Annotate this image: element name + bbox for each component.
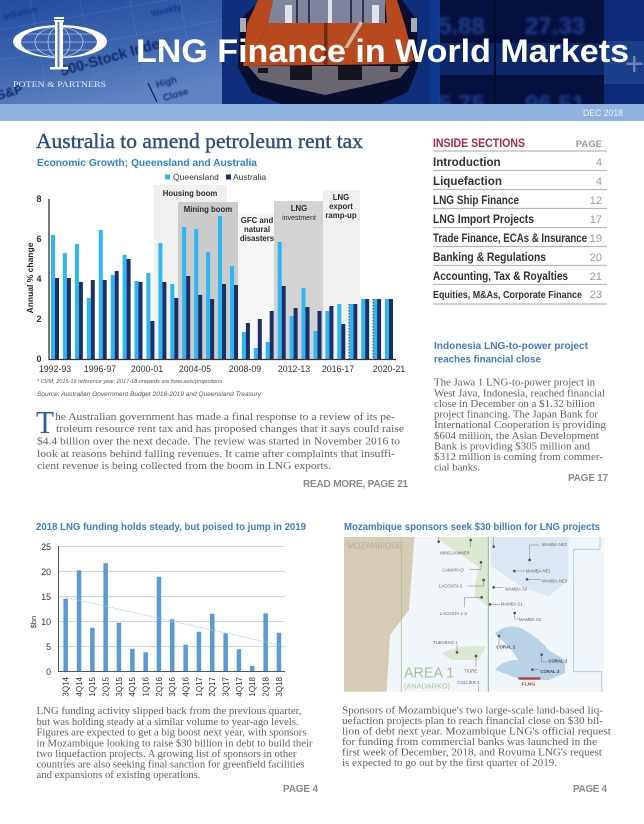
map: Area 1 offshore Mozambique: (ANADARKO) xyxy=(404,682,450,691)
funding article text: two liquefaction projects. A growing list of sponsors in other xyxy=(36,748,297,760)
x axis labels: 3Q14 xyxy=(62,676,70,697)
axes xyxy=(49,199,396,360)
y axis labels: 0 xyxy=(36,354,42,364)
well lines xyxy=(439,537,547,692)
panel: inside sections: Equities, M&As, Corporate Finance xyxy=(433,290,582,301)
period labels: Mining boom xyxy=(184,205,232,214)
panel: inside sections xyxy=(433,138,607,304)
panel: inside sections: Accounting, Tax & Royalties xyxy=(433,270,568,283)
y axis labels: 2 xyxy=(36,314,42,324)
well labels: MAMBA NE3 xyxy=(542,579,568,584)
x axis labels xyxy=(39,364,405,374)
country label: MOZAMBIQUE xyxy=(348,542,402,551)
Queensland bars xyxy=(51,216,389,359)
x axis labels: 2Q18 xyxy=(262,676,270,697)
funding bars xyxy=(63,563,281,671)
well labels: LACOSTA 2 xyxy=(439,583,463,588)
title: LNG Finance in World Markets xyxy=(136,33,629,69)
x axis labels: 4Q17 xyxy=(235,676,244,697)
side story text: Bank is providing $305 million and xyxy=(434,440,590,452)
panel: inside sections: 4 xyxy=(596,176,602,188)
side story text: West Java, Indonesia, reached financial xyxy=(434,388,605,400)
well labels: TUBARAO 1 xyxy=(433,640,458,645)
x axis labels: 4Q15 xyxy=(128,676,137,697)
map article text: is expected to go out by the first quarter of 2019. xyxy=(342,757,557,769)
funding article text: LNG funding activity slipped back from the previous quarter, xyxy=(36,705,302,717)
period labels: GFC and xyxy=(241,216,273,225)
period labels: natural xyxy=(244,225,270,234)
trend line xyxy=(66,597,279,645)
period labels: Housing boom xyxy=(163,189,217,198)
y axis unit: $bn xyxy=(29,616,38,628)
y axis labels: 5 xyxy=(46,642,51,652)
well labels: WINDJAMMER xyxy=(440,550,470,555)
well labels: CAMARAO xyxy=(442,568,465,573)
chart footnote: * CVM, 2015-16 reference year, 2017-18 onwards are forecasts/projections xyxy=(37,379,222,385)
x axis labels: 1Q15 xyxy=(88,676,97,697)
panel: inside sections: Introduction xyxy=(433,156,501,169)
funding article text: but was holding steady at a similar volume to year-ago levels. xyxy=(36,716,299,728)
side story heading: Indonesia LNG-to-power project xyxy=(434,340,588,352)
area label: AREA 1 xyxy=(404,666,454,682)
x axis labels: 3Q18 xyxy=(275,676,284,697)
side story text: cial banks. xyxy=(434,462,480,474)
x axis labels: 4Q16 xyxy=(182,676,190,697)
period labels: export xyxy=(329,202,353,211)
logo wordmark: POTEN & PARTNERS xyxy=(13,80,106,89)
lead article text: he Australian government has made a final response to a review of its pe- xyxy=(55,411,395,423)
well labels: CORAL 3 xyxy=(540,669,560,674)
y axis labels: 10 xyxy=(41,617,51,627)
y axis labels: 0 xyxy=(46,667,51,677)
panel: inside sections: Trade Finance, ECAs & Insurance xyxy=(433,232,587,245)
chart subtitle: Economic Growth; Queensland and Australia xyxy=(37,157,257,169)
x axis labels: 1992-93 xyxy=(39,364,71,374)
period labels xyxy=(163,189,357,243)
period shading xyxy=(154,185,360,359)
funding page reference: PAGE 4 xyxy=(283,784,318,795)
x axis labels: 2Q16 xyxy=(155,676,164,697)
y axis labels: 15 xyxy=(41,592,51,602)
funding article text: in Mozambique looking to raise $30 billion in debt to build their xyxy=(36,738,313,750)
header banner: Inflation xyxy=(2,4,38,22)
panel: inside sections: PAGE xyxy=(576,139,602,150)
side story text: close in December on a $1.32 billion xyxy=(434,398,595,410)
read more link: READ MORE, PAGE 21 xyxy=(303,479,408,490)
x axis labels: 3Q17 xyxy=(222,676,230,697)
side story heading: reaches financial close xyxy=(434,354,541,366)
header banner: Close xyxy=(162,86,190,104)
x axis labels: 3Q16 xyxy=(168,676,177,697)
well labels: MAMBA S1 xyxy=(501,601,523,606)
period labels: ramp-up xyxy=(325,211,357,220)
panel: inside sections: Liquefaction xyxy=(433,175,502,188)
chart: LNG funding xyxy=(29,542,285,697)
header banner: 5.88 xyxy=(438,13,485,40)
x axis labels: 2020-21 xyxy=(373,364,405,374)
panel: inside sections: 19 xyxy=(590,233,602,245)
axes xyxy=(58,546,285,672)
header banner: 27.33 xyxy=(525,13,585,40)
panel: inside sections: LNG Ship Finance xyxy=(433,194,519,207)
panel: inside sections: LNG Import Projects xyxy=(433,213,534,226)
x axis labels: 1Q18 xyxy=(248,676,257,697)
date band: DEC 2018 xyxy=(583,108,623,119)
map article text: uefaction projects plan to reach financial close on $30 bil- xyxy=(342,715,603,727)
map article text: first week of December, 2018, and Rovuma LNG's request xyxy=(342,746,602,758)
x axis labels: 1Q17 xyxy=(195,676,204,697)
lead article text xyxy=(36,404,404,472)
header banner: 500-Stock Index xyxy=(59,34,169,80)
y axis labels: 20 xyxy=(41,567,51,577)
legend xyxy=(165,172,266,182)
panel: inside sections: 17 xyxy=(590,214,602,226)
side story heading xyxy=(434,340,588,366)
map article text xyxy=(342,704,611,769)
well labels: CORAL 1 xyxy=(548,658,568,663)
side story page reference: PAGE 17 xyxy=(568,473,608,484)
toc heading: INSIDE SECTIONS xyxy=(433,138,525,150)
x axis labels: 2Q17 xyxy=(208,676,217,697)
well labels xyxy=(433,542,568,685)
x axis labels: 2004-05 xyxy=(179,364,211,374)
FLNG vessel: FLNG xyxy=(522,681,535,687)
lead article text: look at reasons behind falling revenues. It came after complaints that insuffi- xyxy=(37,448,395,460)
block boundaries xyxy=(400,537,403,692)
FLNG vessel xyxy=(518,677,540,687)
map article text: lion of debt next year. Mozambique LNG's official request xyxy=(342,726,611,738)
x axis labels: 1Q16 xyxy=(142,676,150,697)
lead article text: cient revenue is being collected from the boom in LNG exports. xyxy=(37,460,331,472)
panel: inside sections: 20 xyxy=(590,252,602,264)
side story text: project financing. The Japan Bank for xyxy=(434,408,598,420)
y axis title: Annual % change xyxy=(25,242,35,313)
Australia bars xyxy=(55,259,393,359)
well labels: MAMBA NE2 xyxy=(542,542,568,547)
legend: Queensland xyxy=(173,172,219,182)
x axis labels: 4Q14 xyxy=(75,676,84,697)
side story text xyxy=(434,376,607,474)
y axis labels: 25 xyxy=(41,542,51,552)
chart source: Source: Australian Government Budget 2018-2019 and Queensland Treasury xyxy=(37,391,262,398)
y axis labels xyxy=(36,194,42,364)
header banner: 5.75 xyxy=(438,91,485,118)
panel: inside sections: Banking & Regulations xyxy=(433,251,546,264)
panel: inside sections: 12 xyxy=(590,195,602,207)
well labels: TIGRE xyxy=(464,668,477,673)
map page reference: PAGE 4 xyxy=(573,784,607,795)
funding chart heading: 2018 LNG funding holds steady, but poised to jump in 2019 xyxy=(36,521,306,533)
funding article text: countries are also seeking final sanction for greenfield facilities xyxy=(36,758,304,770)
header banner: 96.51 xyxy=(525,91,585,118)
well labels: COLLIER 1 xyxy=(457,680,480,685)
map article text: for funding from commercial banks was launched in the xyxy=(342,736,597,748)
panel: inside sections: 23 xyxy=(590,289,602,301)
x axis labels: 3Q15 xyxy=(115,676,124,697)
x axis labels: 2012-13 xyxy=(278,364,310,374)
panel: inside sections: 21 xyxy=(590,271,602,283)
well labels: CORAL 2 xyxy=(496,645,516,650)
x axis labels: 2Q15 xyxy=(102,676,110,697)
well dots xyxy=(437,539,543,671)
well labels: MAMBA S2 xyxy=(519,617,542,622)
chart: economic growth xyxy=(25,172,405,374)
period labels: LNG xyxy=(333,193,349,202)
funding article text: Figures are expected to get a big boost next year, with sponsors xyxy=(36,726,306,738)
map heading: Mozambique sponsors seek $30 billion for LNG projects xyxy=(344,521,600,533)
map article text: Sponsors of Mozambique's two large-scale land-based liq- xyxy=(342,704,603,716)
date band xyxy=(0,104,644,121)
header banner xyxy=(0,0,644,118)
x axis labels: 2016-17 xyxy=(322,364,354,374)
panel: inside sections: 4 xyxy=(596,157,602,169)
well labels: LACOSTA 1-3 xyxy=(440,611,467,616)
y axis labels: 4 xyxy=(36,274,42,284)
well labels: MAMBA S3 xyxy=(505,586,528,591)
x axis labels: 1996-97 xyxy=(84,364,116,374)
period labels: disasters xyxy=(240,234,275,243)
side story text: The Jawa 1 LNG-to-power project in xyxy=(434,376,595,388)
funding article text: and expansions of existing operations. xyxy=(36,769,201,781)
logo xyxy=(13,17,107,70)
forecast dividers xyxy=(349,299,373,359)
legend: Australia xyxy=(233,172,266,182)
x axis labels: 2000-01 xyxy=(131,364,163,374)
y axis labels xyxy=(41,542,51,677)
main headline: Australia to amend petroleum rent tax xyxy=(36,129,363,153)
x axis labels xyxy=(62,676,284,697)
y axis labels: 6 xyxy=(36,234,42,244)
map: Area 1 offshore Mozambique xyxy=(344,537,604,692)
land xyxy=(344,537,414,692)
lead article text: $4.4 billion over the next decade. The review was started in November 2016 to xyxy=(37,436,401,448)
x axis labels: 2008-09 xyxy=(229,364,261,374)
side story text: $604 million, the Asian Development xyxy=(434,430,599,442)
funding article text xyxy=(36,705,313,781)
shaded field areas xyxy=(435,537,488,607)
period labels: investment xyxy=(282,215,316,222)
header banner: High xyxy=(155,74,178,91)
lead article text: troleum resource rent tax and has proposed changes that it says could raise xyxy=(56,423,404,435)
side story text: International Cooperation is providing xyxy=(434,419,607,431)
y axis labels: 8 xyxy=(36,194,42,204)
well labels: MAMBA NE1 xyxy=(526,569,552,574)
side story text: $312 million is coming from commer- xyxy=(434,451,603,463)
header banner: Weekly xyxy=(150,2,182,19)
drop cap: T xyxy=(36,404,54,440)
period labels: LNG xyxy=(291,204,307,213)
